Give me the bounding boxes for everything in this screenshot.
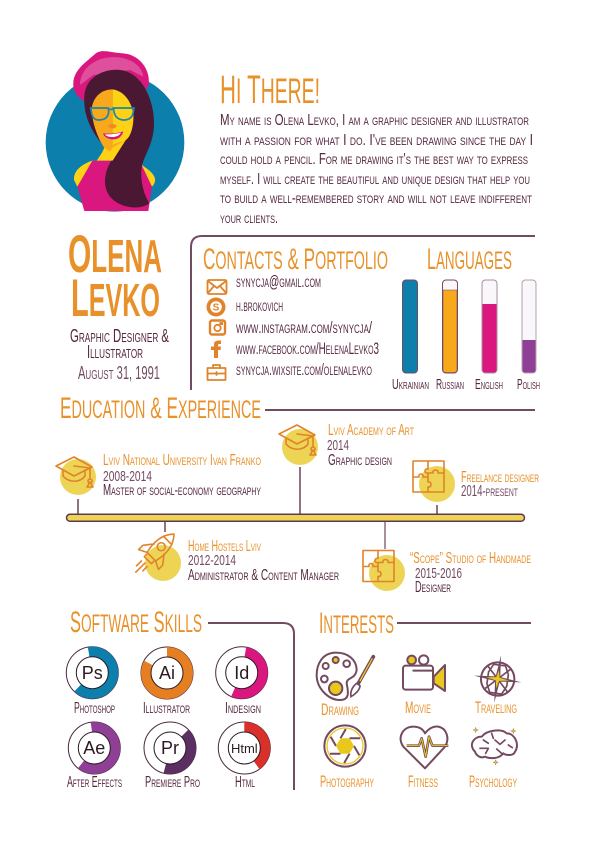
- skill: illustrator: [141, 647, 193, 717]
- item text: Lviv National University Ivan Franko: [103, 452, 261, 469]
- bar: polish: [517, 280, 540, 393]
- language bars: [392, 280, 540, 393]
- timeline item: lviv academy of art: [279, 422, 414, 469]
- job title: Graphic Designer &: [70, 326, 169, 346]
- item text: [461, 469, 539, 500]
- heading: contacts and portfolio: CONTACTS & PORTFOLIO: [203, 243, 388, 276]
- item text: 2012-2014: [188, 552, 236, 569]
- name: OLENA: [68, 225, 162, 284]
- icon: mail: [208, 280, 226, 294]
- bar: russian: [436, 280, 464, 393]
- item text: 2015-2016: [415, 565, 462, 582]
- name: LEVKO: [71, 269, 160, 328]
- timeline item: freelance designer: [413, 461, 539, 502]
- timeline item: lviv national university: [56, 452, 261, 499]
- bar: ukrainian: Ukrainian: [392, 377, 429, 393]
- icon: rocket: [126, 524, 184, 582]
- interest labels: Fitness: [408, 773, 438, 791]
- skill: illustrator: Ai: [159, 663, 175, 683]
- skill: indesign: [216, 647, 268, 717]
- skill: photoshop: Ps: [82, 663, 103, 683]
- title: hi there: HI THERE!: [220, 68, 320, 112]
- interest labels: [320, 699, 517, 791]
- icon: puzzle: [413, 461, 455, 502]
- skill: after effects: Ae: [83, 738, 105, 758]
- interest labels: Photography: [320, 773, 374, 791]
- icon: skype: [206, 298, 226, 316]
- name: [68, 225, 162, 328]
- panel frame: contacts and languages: [191, 236, 535, 390]
- interest labels: Drawing: [321, 701, 359, 719]
- contact text: h.brokovich: [236, 296, 283, 315]
- item text: Lviv Academy of Art: [328, 422, 414, 439]
- birth date: August 31, 1991: [78, 363, 160, 383]
- icon: briefcase: [208, 365, 226, 380]
- heading: languages: LANGUAGES: [427, 243, 512, 276]
- job title: [70, 326, 169, 362]
- item text: 2008-2014: [103, 468, 152, 485]
- bar: english: [475, 280, 503, 393]
- skill: html: [218, 722, 270, 791]
- heading: interests: INTERESTS: [319, 607, 394, 640]
- contacts list: [206, 272, 379, 380]
- item text: [327, 422, 414, 469]
- contact text: synycja.wixsite.com/olenalevko: [236, 360, 372, 379]
- icon: facebook: [211, 340, 221, 358]
- contact text: [236, 272, 379, 379]
- timeline item: scope studio: [363, 550, 531, 596]
- skill: indesign: Indesign: [225, 700, 261, 717]
- interest labels: Traveling: [475, 699, 517, 717]
- skill: after effects: After Effects: [67, 774, 122, 791]
- contact text: www.facebook.com/HelenaLevko3: [236, 339, 379, 358]
- intro paragraph: [220, 112, 533, 227]
- timeline item: home hostels lviv: [126, 524, 339, 584]
- icon: graduation cap: [279, 425, 318, 465]
- icon: graduation cap: [56, 457, 96, 495]
- icon: palette: [317, 653, 373, 700]
- icon: camera aperture: [324, 725, 366, 767]
- skill: illustrator: Illustrator: [143, 700, 190, 717]
- skill: indesign: Id: [234, 663, 249, 683]
- skill: photoshop: Photoshop: [74, 700, 115, 717]
- interest labels: Movie: [405, 699, 431, 717]
- name block: [68, 225, 169, 383]
- item text: 2014: [327, 437, 349, 454]
- skill: premiere pro: [140, 718, 200, 791]
- item text: Home Hostels Lviv: [188, 538, 261, 555]
- icon: compass: [471, 652, 525, 706]
- item text: [410, 550, 531, 596]
- skill: premiere pro: Premiere Pro: [145, 774, 200, 791]
- contact text: www.instagram.com/synycja/: [236, 318, 372, 337]
- portrait avatar: [46, 51, 184, 212]
- icon: puzzle: [363, 550, 405, 591]
- skill: html: Html: [231, 741, 258, 756]
- interest labels: Psychology: [469, 773, 517, 791]
- icon: brain: [472, 727, 517, 765]
- item text: Administrator & Content Manager: [188, 567, 339, 584]
- skill: premiere pro: Pr: [161, 738, 179, 758]
- contact text: synycja@gmail.com: [236, 272, 321, 291]
- item text: Freelance designer: [461, 469, 539, 486]
- item text: Designer: [415, 579, 451, 596]
- heading: education and experience: EDUCATION & EXPERIENCE: [60, 392, 261, 425]
- bar: polish: Polish: [517, 377, 540, 393]
- skill: photoshop: [66, 647, 118, 717]
- intro paragraph: your clients.: [220, 210, 278, 227]
- item text: 2014-present: [461, 483, 518, 500]
- item text: [103, 452, 261, 499]
- timeline: [66, 467, 524, 549]
- bar: ukrainian: [392, 280, 429, 393]
- skill: html: Html: [235, 774, 255, 791]
- item text: Master of social-economy geography: [103, 482, 261, 499]
- icon: instagram: [210, 320, 225, 334]
- item text: [188, 538, 339, 584]
- icon: heart pulse: [401, 726, 448, 768]
- skill: after effects: [67, 722, 122, 791]
- job title: Illustrator: [87, 342, 143, 362]
- item text: Graphic design: [328, 452, 392, 469]
- heading: software skills: SOFTWARE SKILLS: [70, 606, 202, 639]
- bar: russian: Russian: [436, 377, 464, 393]
- icon: movie camera: [403, 655, 445, 691]
- icon: skype: S: [213, 302, 220, 314]
- bar: english: English: [475, 377, 503, 393]
- interest icons: [317, 652, 525, 768]
